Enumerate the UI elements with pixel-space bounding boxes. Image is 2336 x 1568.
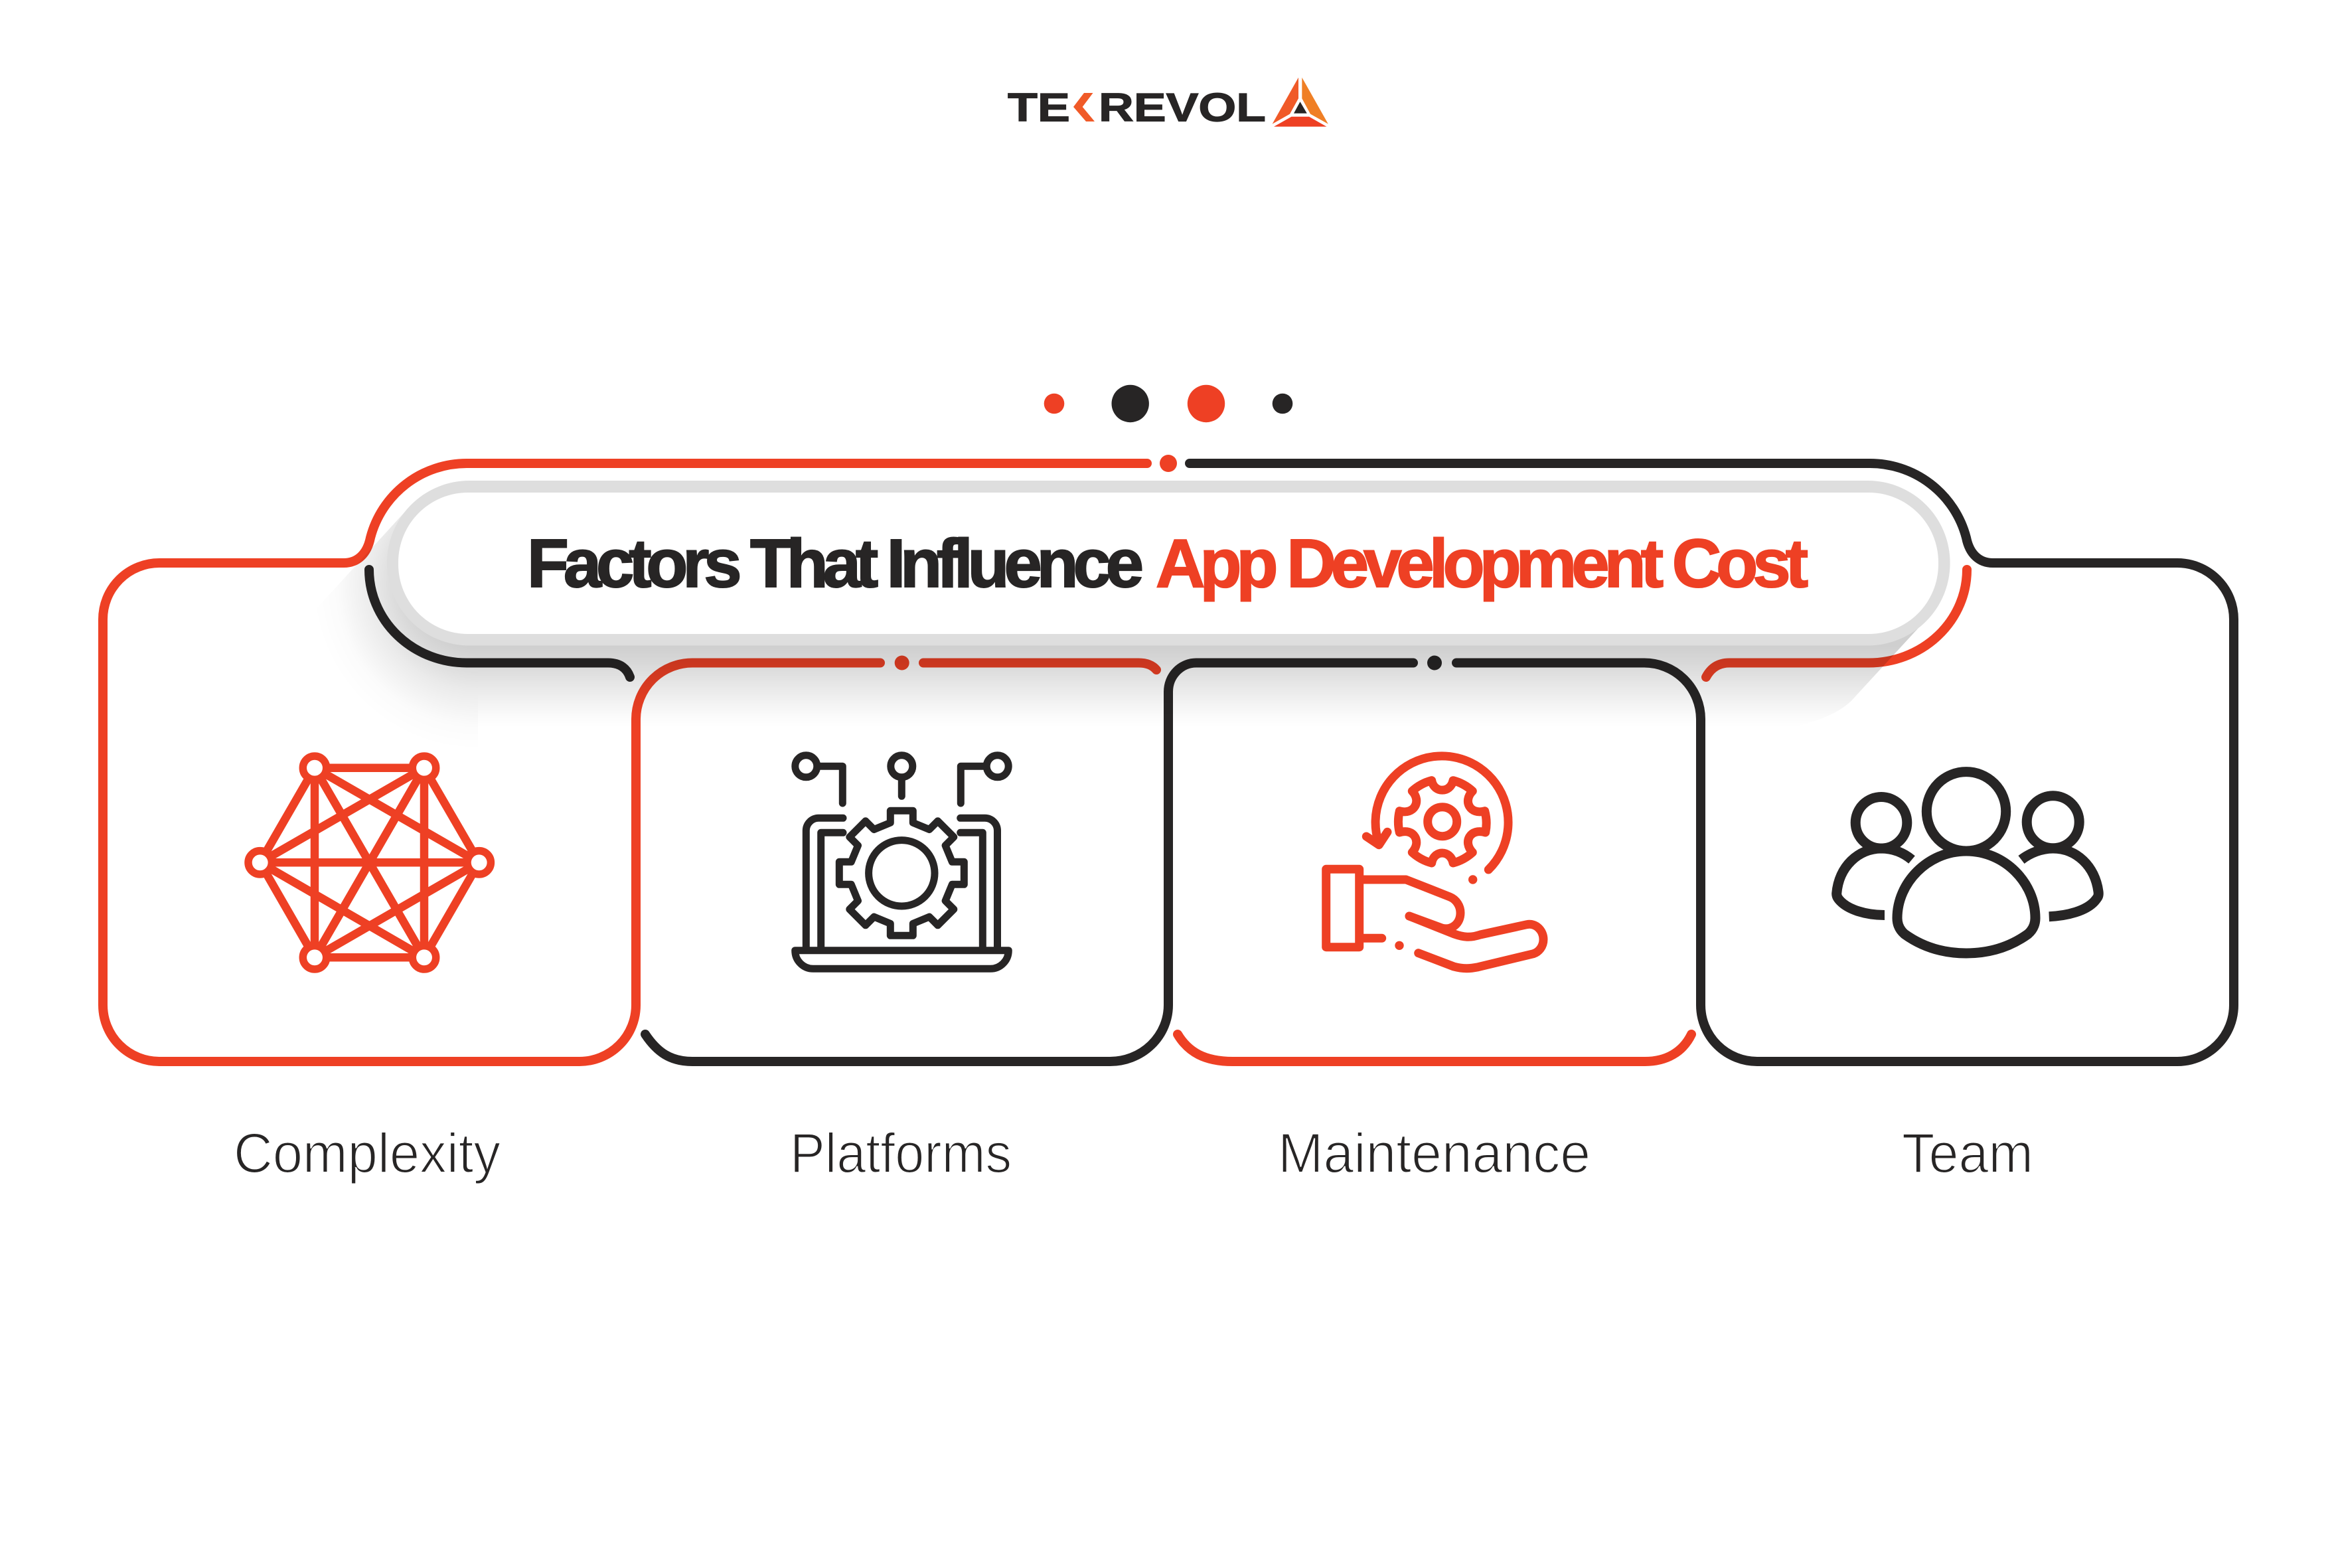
title pill [387,481,1950,645]
labels [234,1122,2033,1184]
label: Team: Team [1902,1122,2033,1184]
outline: red Maintenance bottom [1178,1034,1691,1061]
outline: red top of Platforms card right part [923,663,1156,670]
label: Complexity: Complexity [234,1122,501,1184]
outline: black frame around Team card [1190,463,2234,1061]
title [527,525,1808,601]
icon: platforms laptop with gear [795,755,1008,969]
outline: red frame around Complexity card [103,463,1147,1061]
connected card outlines [103,463,2234,1061]
outline: red arc under title right [1706,570,1967,677]
icon: complexity network [248,756,491,969]
label: Platforms: Platforms [790,1122,1012,1184]
icon: team of three people [1837,772,2098,953]
title pill shadow [305,505,1925,750]
logo: TEKREVOL: TE [1008,85,1070,130]
connector dots [895,455,1442,670]
icon: maintenance hand with gear [1326,756,1543,969]
title: App Development Cost [1156,525,1808,601]
outline: black arc under title left [369,570,630,677]
decorative dots row [1044,385,1292,422]
logo: TEKREVOL [1008,78,1328,130]
logo: TEKREVOL: REVOL [1099,85,1266,130]
label: Maintenance: Maintenance [1278,1122,1591,1184]
outline: black Platforms bottom and Maintenance left [645,663,1413,1061]
title: Factors That Influence [527,525,1144,601]
